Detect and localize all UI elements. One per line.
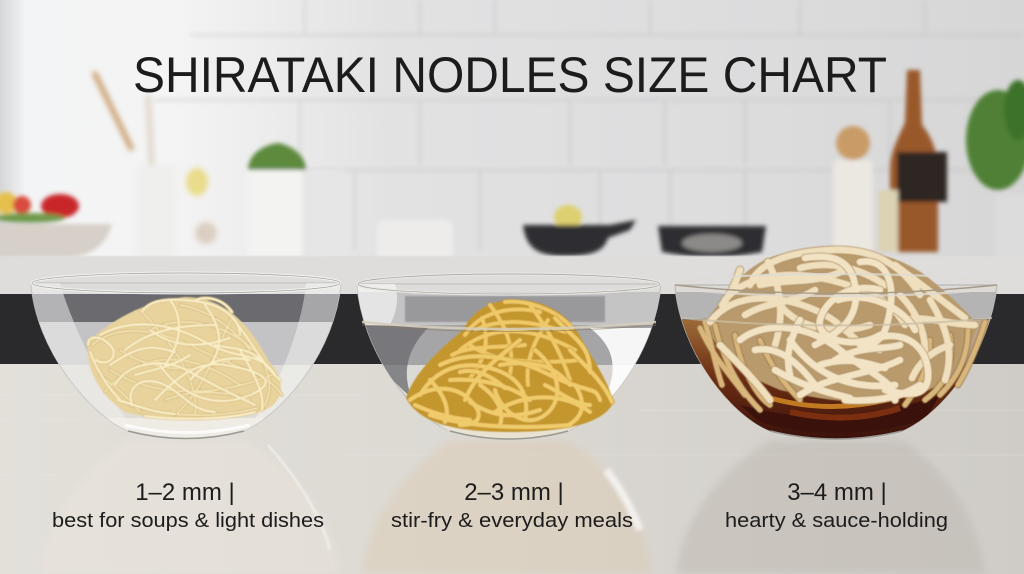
glass rim: [32, 273, 340, 438]
caption: 1-2 mm: best for soups & light dishes: [52, 510, 324, 532]
glass body: [31, 283, 341, 438]
caption: 1-2 mm: 1–2 mm |: [135, 479, 235, 506]
glass body: [675, 285, 997, 439]
prop: green plant: [966, 80, 1024, 260]
noodle pile: thick: [700, 249, 985, 410]
prop: fruit bowl: [0, 192, 112, 258]
kitchen background wall: [0, 0, 1024, 262]
caption: 2-3 mm: [391, 479, 633, 532]
prop: black pan: [658, 226, 766, 257]
prop: utensils in white jar: [94, 72, 217, 260]
glass body: [357, 284, 661, 439]
prop: black mortar with lemon: [523, 205, 636, 256]
title: SHIRATAKI NODLES SIZE CHART: [133, 47, 887, 103]
caption: 1-2 mm: [52, 479, 324, 532]
caption: 3-4 mm: 3–4 mm |: [787, 479, 887, 506]
bowl reflections on counter: [44, 440, 985, 574]
caption: 3-4 mm: hearty & sauce-holding: [725, 510, 948, 532]
prop: white pot with herb: [247, 143, 344, 258]
prop: salt grinder: [833, 126, 873, 255]
marble counter: [0, 364, 1024, 574]
prop: wooden board and bottle: [878, 70, 947, 252]
water line and rim: [675, 274, 997, 439]
noodle pile: medium: [406, 300, 612, 432]
water line and rim: [358, 274, 660, 439]
reflection: bowl 1: [44, 440, 340, 574]
reflection: bowl 3: [676, 440, 985, 574]
noodle pile: thin: [88, 297, 282, 420]
bowl 2: medium noodles: [357, 274, 661, 446]
reflection: bowl 2: [363, 440, 652, 574]
caption: 3-4 mm: [725, 479, 948, 532]
prop: small white cup: [377, 220, 453, 264]
bowl 3: thick noodles in sauce: [675, 249, 997, 439]
blurred kitchen props: [0, 70, 1024, 264]
back counter and dark cabinets: [0, 256, 1024, 364]
caption: 2-3 mm: 2–3 mm |: [464, 479, 564, 506]
bowl 1: thin noodles: [31, 273, 341, 448]
caption: 2-3 mm: stir-fry & everyday meals: [391, 510, 633, 532]
